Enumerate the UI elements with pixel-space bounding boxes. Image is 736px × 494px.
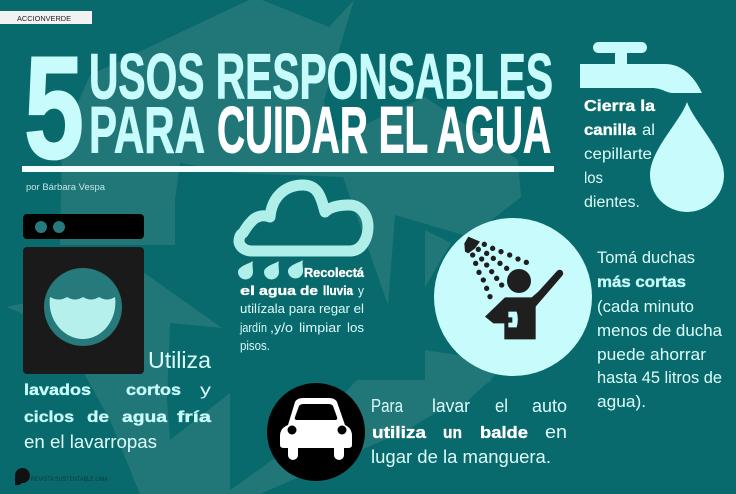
rain text: los — [347, 320, 365, 335]
shower text: puede ahorrar — [597, 345, 706, 364]
car text: el — [495, 396, 508, 416]
shower text: menos de ducha — [597, 321, 723, 340]
car text: Para — [371, 396, 404, 416]
rain text: el — [240, 283, 255, 298]
rain text: y — [358, 283, 364, 298]
rain text — [239, 265, 365, 353]
car text: lavar — [432, 396, 470, 416]
washing machine text: fría — [177, 409, 211, 426]
rain text: ,y/o — [270, 320, 293, 335]
washing machine text: cortos — [126, 382, 181, 399]
section tag: ACCIONVERDE — [17, 14, 71, 23]
icon: washing machine — [23, 214, 144, 374]
rain text: limpiar — [299, 320, 342, 335]
icon: person showering — [434, 218, 592, 376]
faucet text: dientes. — [584, 194, 640, 211]
rain text: pisos. — [240, 338, 270, 353]
washing machine text: y — [200, 382, 211, 399]
washing machine text: ciclos — [24, 409, 74, 426]
rain text: agua — [259, 283, 297, 298]
car text — [371, 396, 567, 467]
title: 5 — [24, 26, 84, 189]
icon: faucet — [580, 42, 702, 93]
shower text — [597, 248, 723, 411]
car text: en — [545, 422, 567, 442]
faucet text: cepillarte — [584, 146, 652, 163]
washing machine text: en el lavarropas — [24, 432, 157, 452]
rain text: de — [300, 283, 318, 298]
title: PARA — [89, 92, 205, 166]
shower text: Tomá duchas — [597, 248, 695, 267]
faucet text: al — [642, 122, 655, 139]
rain text: Recolectá — [304, 265, 365, 280]
shower text: hasta 45 litros de — [597, 368, 722, 387]
shower text: más cortas — [597, 274, 686, 291]
background: recycling arrows — [7, 0, 521, 494]
car text: auto — [532, 396, 567, 416]
icon: car — [267, 383, 365, 481]
footer credit — [15, 468, 109, 485]
faucet text: los — [584, 170, 603, 187]
faucet text: Cierra la — [584, 98, 655, 115]
washing machine text — [24, 347, 211, 452]
washing machine text: agua — [122, 409, 167, 426]
title — [24, 26, 553, 189]
rain text: jardín — [239, 320, 267, 335]
car text: un — [443, 423, 462, 442]
icon: rain cloud — [238, 185, 368, 280]
car text: utiliza — [372, 423, 427, 442]
rain text: utilízala para regar el — [240, 301, 364, 316]
icon: water drop — [650, 102, 724, 212]
car text: balde — [480, 423, 528, 442]
shower text: agua). — [597, 392, 646, 411]
washing machine text: lavados — [24, 382, 91, 399]
section tag — [0, 11, 92, 24]
faucet text: canilla — [584, 122, 636, 139]
washing machine text: Utiliza — [148, 347, 211, 373]
footer credit: REVISTA SUSTENTABLE LIMA — [31, 476, 109, 483]
faucet text — [584, 98, 655, 211]
byline: por Bárbara Vespa — [26, 182, 105, 192]
rain text: lluvia — [323, 283, 354, 298]
title rule — [22, 166, 554, 172]
washing machine text: de — [87, 409, 109, 426]
car text: lugar de la manguera. — [371, 447, 551, 467]
shower text: (cada minuto — [597, 297, 694, 316]
